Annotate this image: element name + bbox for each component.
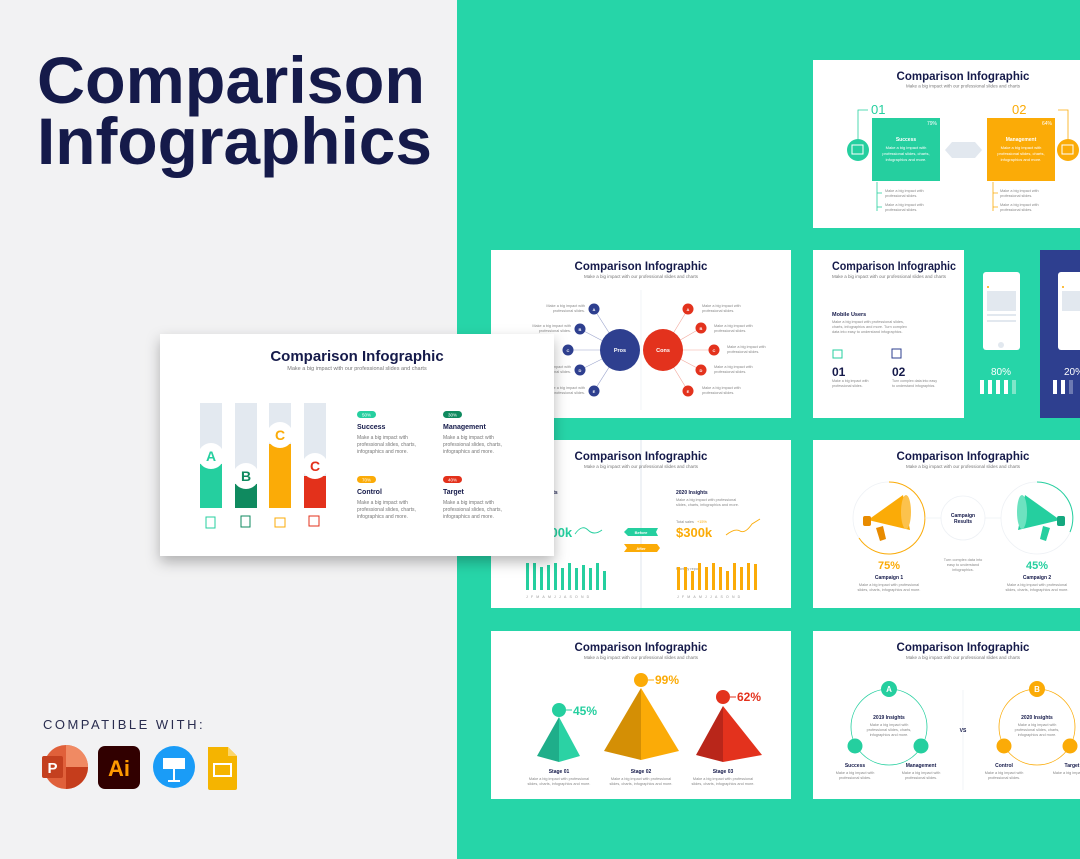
slide: before after bars: After [636,546,646,551]
slide: top right process: Make a big impact with [885,203,924,207]
slide: mobile users [813,250,1080,418]
slide: pros and cons: Comparison Infographic [575,261,708,273]
slide: pros and cons: Make a big impact with our professional slides and charts [584,274,699,279]
slide: pros and cons: B [579,327,582,332]
slide: pros and cons: professional slides. [714,329,746,333]
icon: powerpoint [42,745,88,789]
slide: before after bars: Total sales [676,520,694,524]
legend items: Success [357,424,386,431]
slide: mobile users: Turn complex data into easy [892,379,937,383]
slide: pyramids [491,631,791,799]
slide: mobile users: Make a big impact with our professional slides and charts [832,274,947,279]
slide: pros and cons: A [687,307,690,312]
slide: top right process: professional slides. [1000,208,1032,212]
slide: 2019 vs 2020: infographics and more. [1018,733,1056,737]
slide: top right process: infographics and more. [886,157,926,162]
slide: 2019 vs 2020: Target [1065,763,1080,769]
slide: campaign results: easy to understand [947,563,979,567]
slide: mobile users: 02 [892,365,906,379]
slide: top right process: Management [1006,137,1037,143]
slide: 2019 vs 2020 [813,631,1080,799]
slide: pros and cons: Make a big impact with [532,365,571,369]
slide: campaign results: Results [954,519,972,525]
slide: 2019 vs 2020: professional slides, charts, [1015,728,1059,732]
slide: pros and cons: Cons [656,348,670,354]
slide: pros and cons: C [567,348,570,353]
slide: 2019 vs 2020: Make a big impact with our professional slides and charts [906,655,1021,660]
slide: top right process: Success [896,137,916,143]
slide: top right process: Make a big impact with [885,189,924,193]
slide: campaign results: Make a big impact with professional [1007,583,1067,587]
legend items [357,411,502,520]
legend items: Control [357,489,382,496]
slide: mobile users: data into easy to understand infographics. [832,330,903,334]
slide: pros and cons: A [593,307,596,312]
legend items: Management [443,424,486,431]
legend items: infographics and more. [357,514,408,520]
slide: campaign results: infographics. [952,568,974,572]
legend items: professional slides, charts, [443,442,502,448]
slide: mobile users: 01 [832,365,846,379]
slide: 2019 vs 2020: Make a big impact with [985,771,1023,775]
slide: 2019 vs 2020: A [886,685,892,694]
slide: 2019 vs 2020: Management [906,763,937,769]
slide: campaign results: Make a big impact with our professional slides and charts [906,464,1021,469]
slide: pros and cons: Make a big impact with [702,304,741,308]
legend items: infographics and more. [443,449,494,455]
slide: 2019 vs 2020: professional slides, charts, [867,728,911,732]
slide: mobile users: Mobile Users [832,312,866,318]
slide: pyramids: 99% [655,673,679,687]
legend items: 30% [448,412,457,418]
slide: campaign results: 45% [1026,560,1048,572]
icon: megaphone teal [1017,495,1065,541]
slide: pros and cons: Make a big impact with [714,365,753,369]
slide: before after bars: JFMAMJJASOND [677,595,743,599]
compatible with label: COMPATIBLE WITH: [43,717,205,732]
slide: top right process: infographics and more. [1001,157,1041,162]
slide: before after bars: 2020 Insights [676,490,708,496]
slide: 2019 vs 2020: Make a big impact with [870,723,908,727]
slide: mobile users: charts, infographics and more. Turn complex [832,325,907,329]
slide: pros and cons: Make a big impact with [546,386,585,390]
legend items: 70% [362,478,371,482]
floating slide: bar comparison: Comparison Infographic [270,348,444,365]
slide: pyramids: 62% [737,690,761,704]
slide: pros and cons: Make a big impact with [546,304,585,308]
slide: top right process: Make a big impact with our professional slides and charts [906,84,1021,88]
slide: 2019 vs 2020: infographics and more. [870,733,908,737]
slide: 2019 vs 2020: 2019 Insights [873,715,905,721]
slide: pyramids: Make a big impact with our professional slides and charts [584,655,699,660]
slide: before after bars: $300k [676,525,713,540]
legend items: Make a big impact with [443,500,494,506]
slide: before after bars: $200k [536,525,573,540]
slide: pros and cons: Make a big impact with [532,324,571,328]
slide: pyramids: slides, charts, infographics and more. [610,782,672,786]
slide: pros and cons: D [700,368,703,373]
slide: 2019 vs 2020: Make a big impact with [1018,723,1056,727]
slide: 2019 vs 2020: VS [960,728,967,734]
slide: 2019 vs 2020: Make a big impact with [836,771,874,775]
legend items: professional slides, charts, [357,507,416,513]
slide: campaign results: Campaign [951,513,975,519]
slide: top right process: 64% [1042,121,1053,127]
slide: pyramids: slides, charts, infographics and more. [692,782,754,786]
legend items: Target [443,489,465,496]
slide: top right process: professional slides, charts, [997,151,1045,156]
slide: mobile users: professional slides. [832,384,863,388]
floating slide: bar comparison: Make a big impact with our professional slides and charts [287,366,427,372]
icon: powerpoint: P [47,760,58,777]
slide: pyramids: 45% [573,704,597,718]
slide: 2019 vs 2020: 2020 Insights [1021,715,1053,721]
slide: pyramids: Make a big impact with professional [529,777,589,781]
slide: 2019 vs 2020: Comparison Infographic [897,642,1030,654]
slide: before after bars: Comparison Infographic [575,451,708,463]
icon: google slides [208,747,237,790]
slide: mobile users: Make a big impact with professional slides, [832,320,904,324]
slide: top right process: professional slides, charts, [882,151,930,156]
slide: campaign results: slides, charts, infographics and more. [1006,588,1068,592]
slide: before after bars [491,440,791,608]
slide: top right process: Make a big impact with [1000,203,1039,207]
slide: pyramids: slides, charts, infographics and more. [528,782,590,786]
legend items: infographics and more. [443,514,494,520]
slide: mobile users: Comparison Infographic [832,261,957,273]
slide: pyramids: Make a big impact with professional [693,777,753,781]
slide: pros and cons: E [593,389,596,394]
slide: campaign results: Comparison Infographic [897,451,1030,463]
slide: top right process: professional slides. [885,208,917,212]
main title: Infographics [37,104,432,178]
slide: before after bars: Make a big impact with our professional slides and charts [584,464,699,469]
slide: campaign results: Campaign 2 [1023,575,1051,581]
bar chart: B [241,468,251,484]
slide: pyramids: Comparison Infographic [575,642,708,654]
slide: pyramids: Make a big impact with professional [611,777,671,781]
slide: top right process: professional slides. [885,194,917,198]
slide: pros and cons: professional slides. [553,309,585,313]
bar chart: C [310,458,320,474]
slide: pros and cons: D [579,368,582,373]
legend items: professional slides, charts, [443,507,502,513]
slide: pyramids: Stage 01 [549,769,569,775]
slide: mobile users: Make a big impact with [832,379,869,383]
slide: pros and cons [491,250,791,418]
slide: mobile users: to understand infographics. [892,384,935,388]
slide: pros and cons: Make a big impact with [727,345,766,349]
slide: campaign results [813,440,1080,608]
slide: 2019 vs 2020: Success [845,763,865,769]
slide: top right process: 79% [927,121,938,127]
slide: pros and cons: Pros [614,348,626,354]
slide: pros and cons: professional slides. [702,309,734,313]
slide: pros and cons: professional slides. [539,370,571,374]
slide: pros and cons: Make a big impact with [714,324,753,328]
slide: 2019 vs 2020: Control [995,763,1013,769]
slide: before after bars: JFMAMJJASOND [526,595,592,599]
legend items: Make a big impact with [443,435,494,441]
slide: pros and cons: professional slides. [727,350,759,354]
slide: mobile users: 80% [991,367,1011,378]
main title: Comparison [37,43,425,117]
slide: pros and cons: professional slides. [702,391,734,395]
slide: top right process: 01 [871,102,885,117]
slide: before after bars: 2019 Insights [526,490,558,496]
slide: pros and cons: E [687,389,690,394]
legend items: professional slides, charts, [357,442,416,448]
slide: top right process: Comparison Infographic [897,71,1030,83]
app icons [42,745,237,790]
slide: top right process: Make a big impact with [1001,145,1041,150]
main title [37,43,432,178]
slide: pyramids: Stage 03 [713,769,733,775]
slide: before after bars: slides, charts, infographics and more. [676,503,739,507]
slide: pros and cons: C [713,348,716,353]
slide: pros and cons: professional slides. [553,391,585,395]
bar chart [198,403,328,528]
slide: 2019 vs 2020: professional slides. [905,776,937,780]
slide: top right process [813,60,1080,228]
legend items: 40% [448,478,457,482]
slide: campaign results: Turn complex data into [944,558,982,562]
floating slide: bar comparison [160,334,554,556]
bar chart: C [275,427,285,443]
slide: pros and cons: professional slides. [714,370,746,374]
slide: 2019 vs 2020: Make a big impact with [902,771,940,775]
slide: top right process: professional slides. [1000,194,1032,198]
slide: top right process: Make a big impact with [1000,189,1039,193]
slide: 2019 vs 2020: B [1034,685,1040,694]
slide: top right process: 02 [1012,102,1026,117]
slide: 2019 vs 2020: professional slides. [839,776,871,780]
slide: pros and cons: professional slides. [539,329,571,333]
slide: pros and cons: B [700,326,703,331]
icon: illustrator [98,746,140,789]
legend items: Make a big impact with [357,435,408,441]
bar chart: A [206,448,216,464]
slide: campaign results: Campaign 1 [875,575,903,581]
slide: top right process: Make a big impact with [886,145,926,150]
slide: campaign results: Make a big impact with professional [859,583,919,587]
slide: before after bars: +15% [697,520,707,524]
icon: megaphone orange [863,495,911,541]
legend items: infographics and more. [357,449,408,455]
legend items: Make a big impact with [357,500,408,506]
slide: campaign results: slides, charts, infographics and more. [858,588,920,592]
slide: before after bars: Before [635,530,648,535]
legend items: 50% [362,412,371,418]
icon: keynote [153,746,195,788]
slide: pyramids: Stage 02 [631,769,651,775]
slide: 2019 vs 2020: professional slides. [988,776,1020,780]
slide: before after bars: Monthly report [676,567,701,571]
slide: pros and cons: Make a big impact with [702,386,741,390]
icon: illustrator: Ai [108,756,130,781]
teal background panel [457,0,1080,859]
slide: campaign results: 75% [878,560,900,572]
slide: before after bars: Make a big impact with professional [676,498,736,502]
